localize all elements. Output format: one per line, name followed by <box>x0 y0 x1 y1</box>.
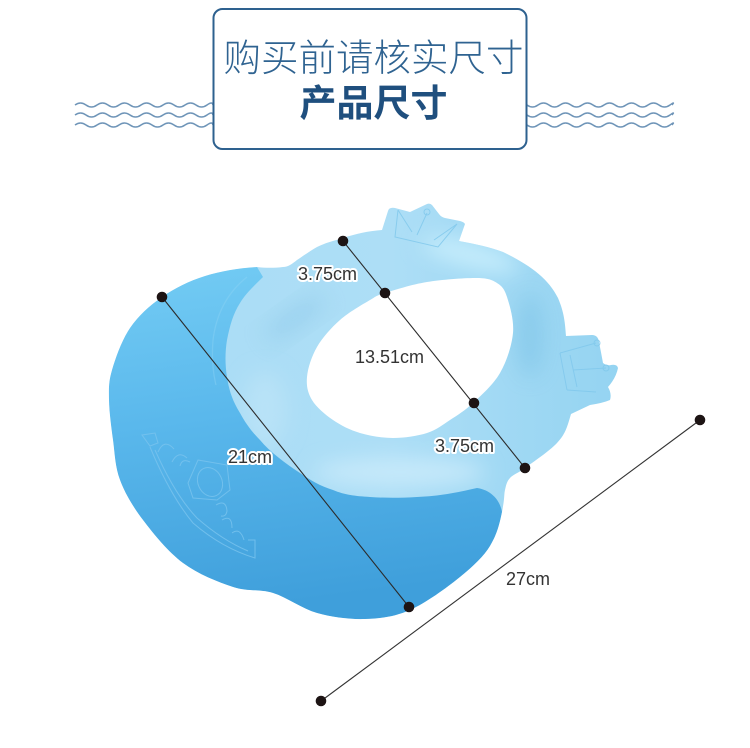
visor embossed arc <box>212 277 247 385</box>
dimension line: ring width and opening <box>338 236 530 473</box>
label: 3.75cm bottom: 3.75cm <box>435 436 494 456</box>
ring band <box>100 195 630 625</box>
label: 3.75cm top: 3.75cm <box>298 264 357 284</box>
label: 21cm: 21cm <box>228 447 272 467</box>
dimension line: overall 27cm <box>316 415 705 706</box>
embossed crown: right <box>560 340 609 392</box>
embossed crown: top <box>395 209 457 247</box>
label: 13.51cm: 13.51cm <box>355 347 424 367</box>
heading: check size before buying: 购买前请核实尺寸 <box>224 37 524 79</box>
embossed tiara <box>142 433 255 558</box>
title panel <box>214 9 526 149</box>
label: 27cm: 27cm <box>506 569 550 589</box>
product: baby shower visor cap <box>100 195 630 625</box>
heading: product size: 产品尺寸 <box>300 83 448 124</box>
decorative waves: right <box>527 103 673 127</box>
dimension line: head height 21cm <box>157 292 414 612</box>
visor <box>109 267 502 619</box>
decorative waves: left <box>75 103 213 127</box>
